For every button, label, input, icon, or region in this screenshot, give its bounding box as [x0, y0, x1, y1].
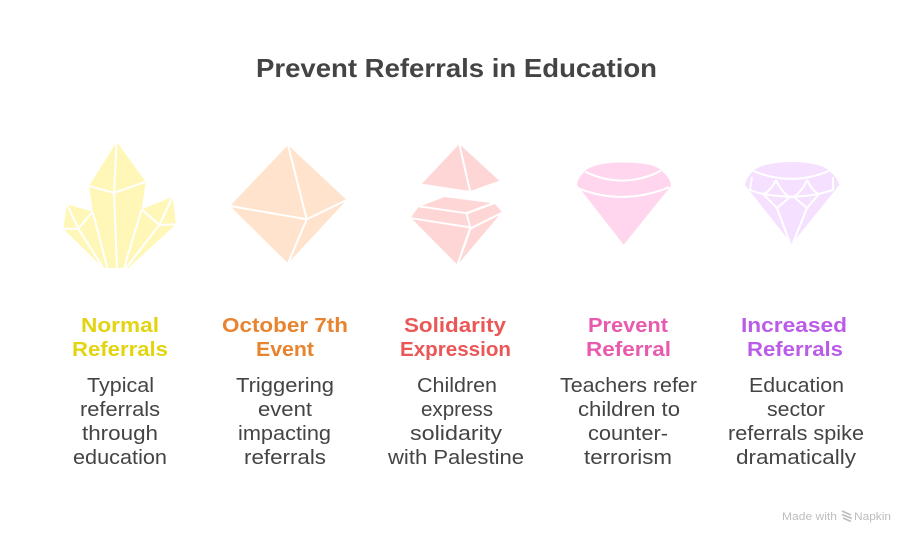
description: solidarity expression: Children [417, 375, 497, 397]
description: normal referrals [73, 375, 167, 469]
description: october 7th event: Triggering [236, 375, 334, 397]
column: normal referrals [63, 142, 176, 469]
label: october 7th event: Event [256, 339, 314, 361]
label: prevent referral [586, 315, 671, 361]
watermark: made with napkin [782, 511, 891, 523]
description: increased referrals: dramatically [736, 447, 856, 469]
label: increased referrals: Referrals [747, 339, 843, 361]
label: normal referrals: Normal [81, 315, 159, 337]
icon: yellow crystal cluster [63, 142, 176, 268]
description: prevent referral: Teachers refer [560, 375, 697, 397]
description: increased referrals [728, 375, 864, 469]
description: increased referrals: Education [749, 375, 844, 397]
label: solidarity expression: Expression [400, 339, 511, 361]
description: prevent referral: terrorism [584, 447, 672, 469]
label: solidarity expression: Solidarity [404, 315, 507, 337]
description: prevent referral [560, 375, 697, 469]
description: solidarity expression: with Palestine [387, 447, 524, 469]
column: october 7th event [222, 145, 348, 469]
icon: orange octahedron [230, 145, 347, 263]
description: normal referrals: education [73, 447, 167, 469]
icon: pink diamond [577, 162, 671, 245]
column: prevent referral [560, 162, 697, 469]
description: solidarity expression: express [421, 399, 493, 421]
icon: red split gem [411, 144, 502, 264]
description: october 7th event: impacting [238, 423, 331, 445]
label: prevent referral: Referral [586, 339, 671, 361]
watermark: made with napkin: Napkin [854, 511, 891, 523]
description: october 7th event: referrals [244, 447, 326, 469]
label: increased referrals [741, 315, 847, 361]
description: normal referrals: through [82, 423, 158, 445]
description: increased referrals: referrals spike [728, 423, 864, 445]
label: prevent referral: Prevent [588, 315, 668, 337]
description: solidarity expression: solidarity [410, 423, 502, 445]
description: solidarity expression [387, 375, 524, 469]
description: prevent referral: children to [578, 399, 680, 421]
description: prevent referral: counter- [588, 423, 668, 445]
column: solidarity expression [387, 144, 524, 469]
label: october 7th event: October 7th [222, 315, 348, 337]
description: october 7th event: event [258, 399, 312, 421]
label: normal referrals [72, 315, 168, 361]
icon: purple brilliant diamond [745, 162, 839, 244]
column: increased referrals [728, 162, 864, 469]
description: increased referrals: sector [767, 399, 825, 421]
label: october 7th event [222, 315, 348, 361]
watermark: made with napkin: Made with [782, 511, 837, 523]
description: normal referrals: referrals [80, 399, 160, 421]
title: Prevent Referrals in Education [256, 53, 657, 83]
description: october 7th event [236, 375, 334, 469]
description: normal referrals: Typical [87, 375, 154, 397]
label: solidarity expression [400, 315, 511, 361]
label: normal referrals: Referrals [72, 339, 168, 361]
label: increased referrals: Increased [741, 315, 847, 337]
